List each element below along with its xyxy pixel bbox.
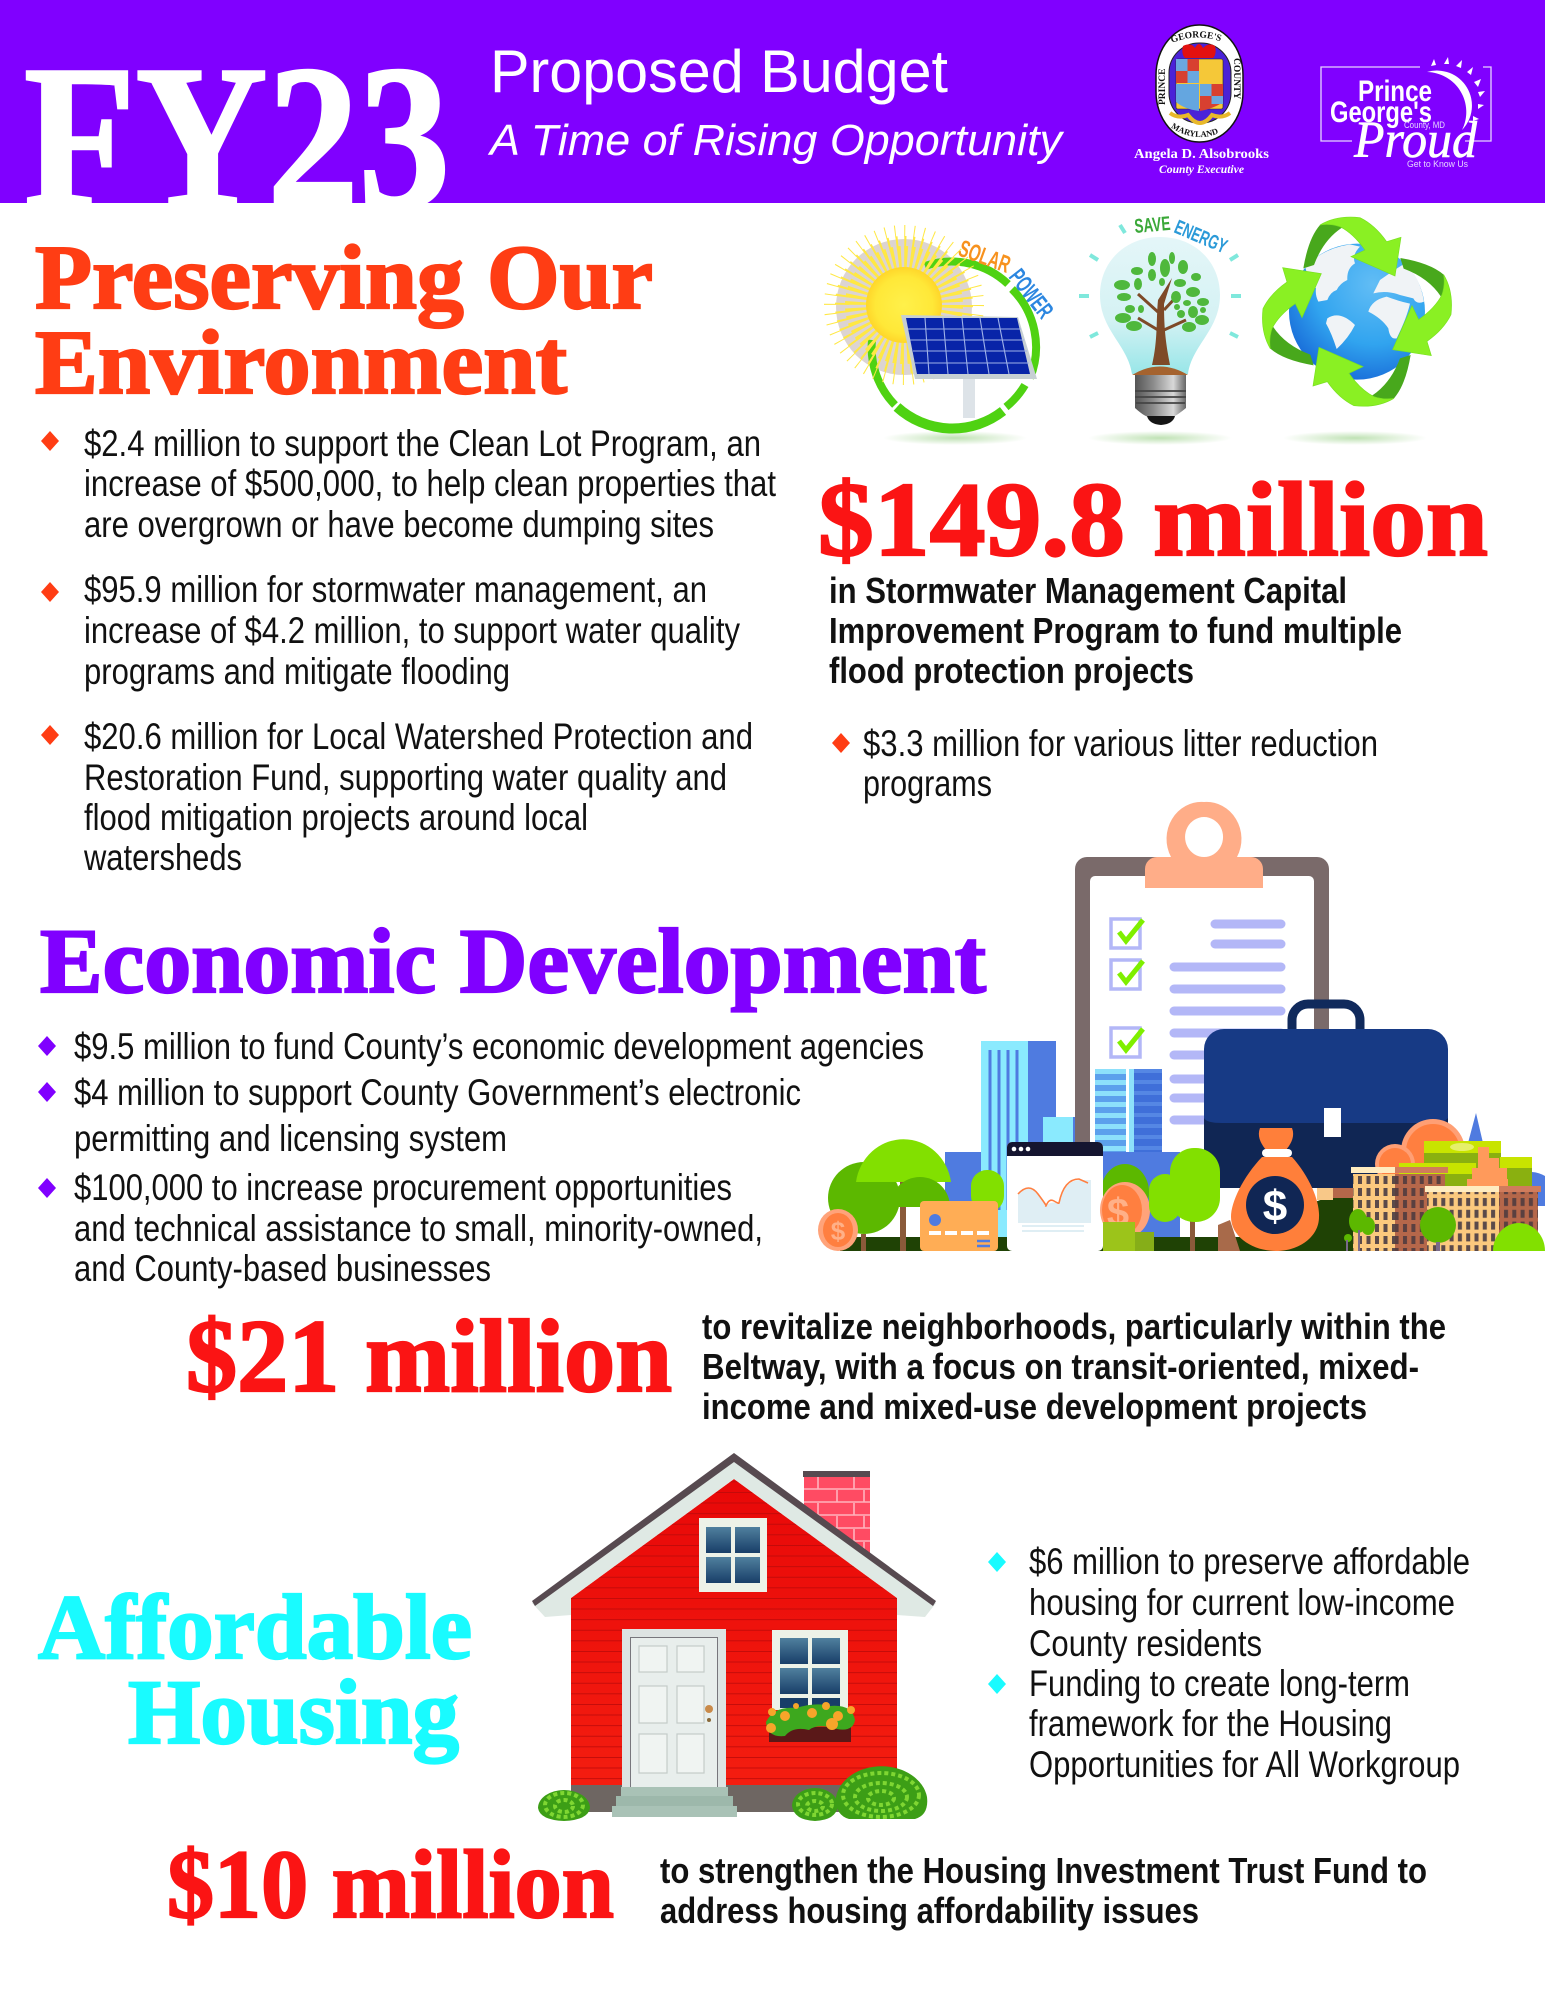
bullet list: are overgrown or have become dumping sites: [84, 504, 714, 545]
bullet list: Funding to create long-term: [1029, 1663, 1410, 1704]
title: Proposed Budget: Proposed Budget: [490, 38, 948, 105]
county seal: PRINCE: [1158, 69, 1165, 105]
litter bullet: $3.3 million for various litter reduction: [863, 723, 1378, 764]
icon: solar power: POWER: [1003, 264, 1058, 324]
callout: $21 million: $21 million: [186, 1299, 672, 1414]
bullet list: $20.6 million for Local Watershed Protection and: [84, 716, 753, 757]
county executive caption: Angela D. Alsobrooks: [1134, 147, 1270, 162]
callout text: [829, 570, 1402, 691]
bullet list: Restoration Fund, supporting water quality and: [84, 757, 727, 798]
callout text: [660, 1850, 1427, 1931]
ground: [840, 1237, 1360, 1251]
callout text: in Stormwater Management Capital: [829, 570, 1347, 611]
front steps: [612, 1787, 737, 1817]
trees left: [828, 1139, 1004, 1251]
FY23 wordmark: FY23: [24, 24, 450, 251]
bullet list: permitting and licensing system: [74, 1118, 507, 1159]
bullet list: programs and mitigate flooding: [84, 651, 510, 692]
money bag: $: [1263, 1182, 1287, 1231]
litter bullet: programs: [863, 763, 992, 804]
county seal: COUNTY: [1234, 58, 1240, 99]
bullet list: increase of $500,000, to help clean properties that: [84, 463, 777, 504]
callout text: Beltway, with a focus on transit-oriented, mixed-: [702, 1346, 1419, 1387]
bullet list: Opportunities for All Workgroup: [1029, 1744, 1460, 1785]
tree behind chart: [1101, 1164, 1149, 1220]
right side coins and cash: [1375, 1113, 1545, 1206]
buildings right: [1344, 1167, 1545, 1251]
door: [622, 1629, 726, 1787]
coin with cash: [1100, 1182, 1154, 1251]
callout text: to revitalize neighborhoods, particularly within the: [702, 1306, 1446, 1347]
callout: $149.8 million: $149.8 million: [818, 461, 1488, 578]
chart card: [1007, 1142, 1103, 1251]
litter bullet: [832, 723, 1378, 804]
bullet list: framework for the Housing: [1029, 1703, 1392, 1744]
coin with cash: $: [1107, 1191, 1129, 1235]
icon: save energy bulb: SAVE: [1134, 213, 1171, 238]
briefcase: [1204, 1004, 1448, 1188]
county seal: [1155, 24, 1244, 143]
panel: affordable housing: [38, 1453, 1470, 1939]
credit card: [920, 1201, 998, 1251]
bullet list: [41, 423, 777, 878]
shrubs: [538, 1766, 927, 1821]
callout text: address housing affordability issues: [660, 1890, 1199, 1931]
bullet list: housing for current low-income: [1029, 1582, 1455, 1623]
bullet list: $9.5 million to fund County’s economic development agencies: [74, 1026, 924, 1067]
logo: Prince George's Proud: County, MD: [1404, 120, 1445, 130]
subtitle: A Time of Rising Opportunity: [487, 116, 1065, 165]
trees middle: [1149, 1148, 1220, 1251]
bullet list: increase of $4.2 million, to support water quality: [84, 610, 740, 651]
heading: Environment: [35, 312, 567, 413]
front window with flower box: [766, 1630, 855, 1742]
bullet list: $100,000 to increase procurement opportunities: [74, 1167, 732, 1208]
heading: Preserving Our: [35, 227, 653, 328]
icon: solar power: SOLAR: [955, 235, 1014, 279]
county executive caption: [1134, 147, 1270, 176]
callout text: Improvement Program to fund multiple: [829, 610, 1402, 651]
callout text: income and mixed-use development projects: [702, 1386, 1367, 1427]
heading: Housing: [128, 1661, 459, 1763]
header banner: [0, 0, 1545, 203]
illustration: red house: [532, 1453, 936, 1821]
bullet list: and County-based businesses: [74, 1248, 491, 1289]
callout text: flood protection projects: [829, 650, 1194, 691]
icon: recycling globe: [1262, 217, 1452, 445]
callout text: [702, 1306, 1446, 1427]
icon: save energy bulb: ENERGY: [1171, 216, 1231, 258]
bullet list: and technical assistance to small, minority-owned,: [74, 1208, 763, 1249]
bullet list: $95.9 million for stormwater management, an: [84, 569, 707, 610]
attic window: [699, 1518, 767, 1592]
bullet list: $2.4 million to support the Clean Lot Program, an: [84, 423, 761, 464]
icon: save energy bulb: [1079, 213, 1241, 445]
bullet list: [38, 1026, 924, 1289]
heading: Affordable: [38, 1576, 472, 1678]
bullet list: County residents: [1029, 1623, 1262, 1664]
callout text: to strengthen the Housing Investment Trust Fund to: [660, 1850, 1427, 1891]
callout: $10 million: $10 million: [167, 1831, 614, 1939]
panel: economic development: [38, 802, 1545, 1427]
county seal: GEORGE'S: [1171, 31, 1222, 42]
bullet list: $4 million to support County Government’s electronic: [74, 1072, 801, 1113]
bullet list: $6 million to preserve affordable: [1029, 1541, 1470, 1582]
heading: Economic Development: [40, 910, 986, 1012]
bullet list: [988, 1541, 1470, 1785]
logo: Prince George's Proud: George's: [1330, 96, 1432, 129]
logo: Prince George's Proud: [1321, 57, 1491, 169]
coin: [818, 1209, 858, 1251]
clipboard: [1075, 802, 1329, 1177]
coin: $: [831, 1216, 846, 1246]
county seal: MARYLAND: [1170, 122, 1218, 138]
logo: Prince George's Proud: Proud: [1353, 112, 1478, 169]
icon: solar power: [830, 231, 1058, 445]
logo: Prince George's Proud: Get to Know Us: [1407, 159, 1468, 169]
county executive caption: County Executive: [1159, 162, 1245, 176]
bullet list: watersheds: [83, 837, 242, 878]
illustration: clipboard, briefcase and city: [818, 802, 1545, 1251]
panel: preserving our environment: [35, 213, 1488, 878]
bullet list: flood mitigation projects around local: [84, 797, 588, 838]
heading: [35, 227, 653, 413]
heading: [38, 1576, 472, 1763]
money bag: [1231, 1128, 1319, 1251]
logo: Prince George's Proud: Prince: [1358, 75, 1432, 108]
